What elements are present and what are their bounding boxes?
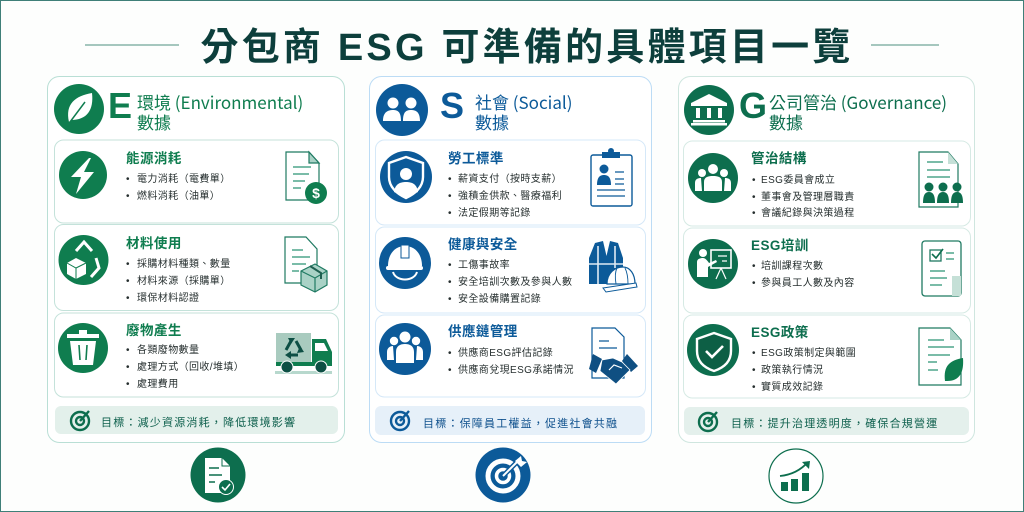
icon: group	[379, 323, 431, 375]
icon: bill document	[286, 152, 327, 204]
list: ESG policy	[752, 346, 856, 393]
list: ESG policy: ESG政策制定與範圍	[761, 346, 856, 359]
heading: E environmental data: 環境 (Environmental)	[137, 89, 303, 114]
list: waste: 處理費用	[137, 377, 179, 390]
list: labour	[448, 172, 562, 219]
icon: checklist	[922, 241, 961, 296]
goal: governance: 目標：提升治理透明度，確保合規營運	[731, 416, 938, 430]
list: labour: •	[448, 208, 452, 219]
list: supply chain	[448, 346, 574, 376]
icon: shield person	[380, 151, 432, 203]
icon: leaf	[54, 84, 104, 134]
list: labour: 強積金供款、醫療福利	[458, 189, 562, 202]
list: waste: •	[126, 379, 130, 390]
list: governance structure: •	[752, 192, 756, 203]
icon: document with parcel	[285, 237, 327, 292]
heading: E environmental data	[108, 85, 303, 134]
heading: S social data: S	[440, 85, 464, 126]
list: health and safety: 安全設備購置記錄	[458, 292, 541, 305]
list: ESG policy: •	[752, 382, 756, 393]
list: supply chain: •	[448, 348, 452, 359]
heading: G governance data: G	[739, 85, 767, 126]
icon: committee	[688, 153, 738, 203]
heading: supply chain: 供應鏈管理	[448, 323, 518, 339]
list: ESG training	[752, 259, 855, 289]
panel: social	[370, 76, 652, 442]
goal: social: 目標：保障員工權益，促進社會共融	[423, 416, 618, 430]
icon: vest and helmet	[589, 241, 637, 292]
list: labour: 法定假期等記錄	[458, 206, 531, 219]
icon: institution	[684, 85, 734, 135]
heading: S social data: 數據	[475, 109, 509, 134]
card: ESG policy	[684, 315, 970, 398]
card: governance structure	[684, 141, 970, 226]
heading: materials: 材料使用	[126, 235, 182, 251]
list: labour: •	[448, 191, 452, 202]
icon: target	[476, 448, 530, 502]
heading: waste: 廢物產生	[126, 322, 182, 338]
list: ESG policy: •	[752, 348, 756, 359]
icon: clipboard	[591, 148, 632, 206]
heading: S social data: 社會 (Social)	[475, 89, 572, 114]
list: governance structure: 董事會及管理層職責	[761, 190, 855, 203]
list: ESG policy: 政策執行情況	[761, 363, 823, 376]
heading: G governance data: 數據	[769, 109, 803, 134]
icon: shield check	[687, 324, 739, 376]
heading: G governance data	[739, 85, 947, 134]
icon: bill document: $	[312, 185, 320, 201]
icon: trash can	[58, 323, 108, 373]
list: materials: •	[126, 276, 130, 287]
list: waste: 各類廢物數量	[137, 343, 199, 356]
heading: E environmental data: 數據	[137, 109, 171, 134]
list: health and safety: 安全培訓次數及參與人數	[458, 275, 572, 288]
heading: S social data	[440, 85, 572, 134]
heading: energy: 能源消耗	[126, 150, 182, 166]
list: materials: 環保材料認證	[137, 291, 199, 304]
list: ESG training: 培訓課程次數	[761, 259, 823, 272]
list: ESG training: •	[752, 261, 756, 272]
list: waste: 處理方式（回收/堆填）	[137, 360, 244, 373]
icon: people	[376, 84, 428, 136]
list: waste: •	[126, 345, 130, 356]
list: health and safety: •	[448, 294, 452, 305]
list: health and safety: 工傷事故率	[458, 258, 510, 271]
list: materials: •	[126, 259, 130, 270]
icon: document check	[190, 448, 246, 502]
list: governance structure	[752, 173, 855, 219]
list: materials: 採購材料種類、數量	[137, 257, 231, 270]
list: ESG training: •	[752, 278, 756, 289]
heading: ESG policy: ESG政策	[751, 324, 809, 340]
list: waste	[126, 343, 244, 390]
list: energy: 燃料消耗（油單）	[137, 189, 220, 202]
icon: lightning	[59, 151, 107, 199]
list: ESG policy: •	[752, 365, 756, 376]
panel: governance	[678, 76, 974, 442]
list: health and safety	[448, 258, 572, 305]
heading: health and safety: 健康與安全	[448, 236, 518, 252]
heading: labour: 勞工標準	[448, 150, 504, 166]
heading: governance structure: 管治結構	[751, 150, 807, 166]
card: energy	[54, 140, 338, 223]
list: health and safety: •	[448, 277, 452, 288]
goal: environmental: 目標：減少資源消耗，降低環境影響	[101, 415, 296, 429]
list: ESG training: 參與員工人數及內容	[761, 276, 855, 289]
list: governance structure: •	[752, 175, 756, 186]
card: materials	[54, 224, 338, 310]
card: labour	[376, 140, 646, 225]
list: energy: •	[126, 191, 130, 202]
list: governance structure: ESG委員會成立	[761, 173, 835, 186]
card: waste	[54, 313, 338, 397]
list: supply chain: 供應商ESG評估記錄	[458, 346, 553, 359]
icon: document and handshake	[589, 328, 638, 384]
heading: ESG training: ESG培訓	[751, 237, 809, 253]
title: 分包商 ESG 可準備的具體項目一覽	[201, 27, 853, 69]
list: supply chain: 供應商兌現ESG承諾情況	[458, 363, 574, 376]
list: supply chain: •	[448, 365, 452, 376]
goal: social	[375, 406, 645, 435]
icon: document with leaf	[919, 328, 963, 385]
card: health and safety	[376, 227, 646, 313]
list: labour: 薪資支付（按時支薪）	[458, 172, 562, 185]
icon: recycling truck	[275, 333, 332, 374]
card: ESG training	[684, 228, 970, 313]
list: energy: 電力消耗（電費單）	[137, 172, 231, 185]
list: materials	[126, 257, 231, 304]
heading: E environmental data: E	[108, 85, 132, 126]
goal: environmental	[55, 406, 338, 434]
icon: document with people	[919, 152, 963, 207]
icon: hard hat	[379, 237, 431, 289]
panel: environmental	[48, 76, 344, 442]
list: health and safety: •	[448, 260, 452, 271]
goal: governance	[684, 407, 969, 435]
list: governance structure: 會議紀錄與決策過程	[761, 206, 855, 219]
card: supply chain	[376, 315, 646, 397]
list: labour: •	[448, 174, 452, 185]
list: governance structure: •	[752, 208, 756, 219]
icon: trainer	[688, 239, 738, 289]
list: waste: •	[126, 362, 130, 373]
list: ESG policy: 實質成效記錄	[761, 380, 823, 393]
list: materials: 材料來源（採購單）	[137, 274, 231, 287]
list: energy: •	[126, 174, 130, 185]
list: materials: •	[126, 293, 130, 304]
list: energy	[126, 172, 231, 202]
heading: G governance data: 公司管治 (Governance)	[769, 89, 947, 114]
icon: recycle box	[58, 235, 108, 285]
icon: growth chart	[769, 449, 823, 503]
